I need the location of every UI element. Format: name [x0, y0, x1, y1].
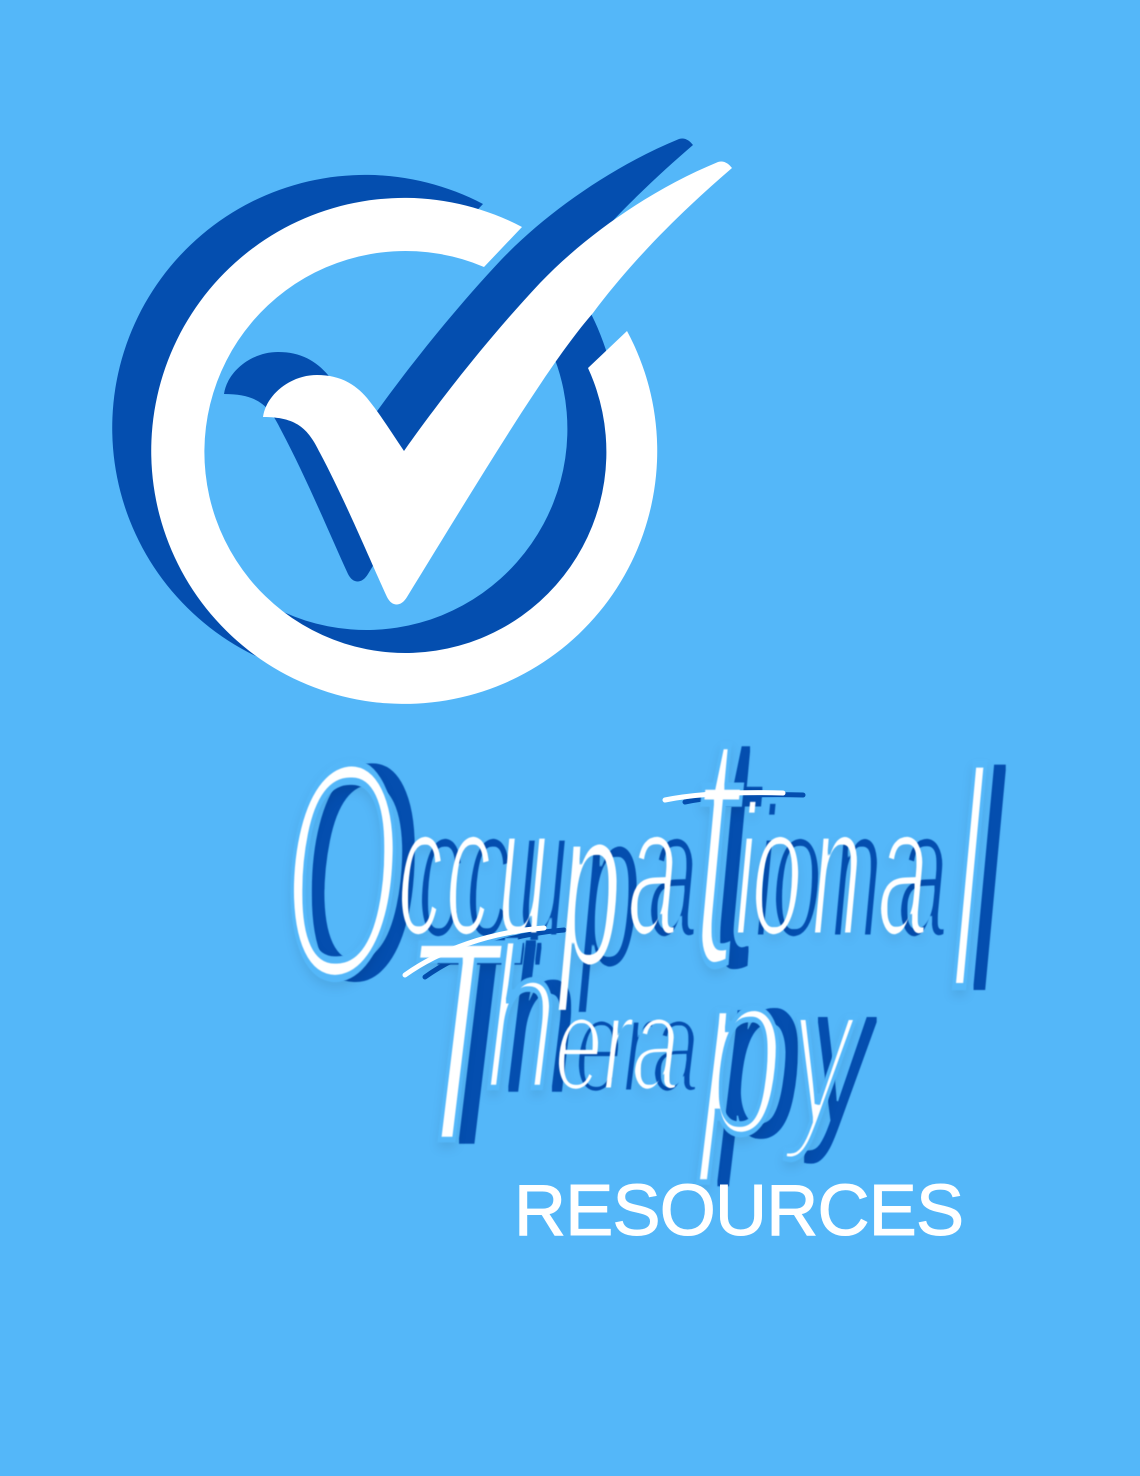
logo: circled check mark: [112, 138, 732, 704]
heading line: Occupational: i: [735, 767, 757, 976]
title shadow: Occupational Therapy in dark blue: [303, 657, 1007, 1206]
icon: white ring: [151, 198, 657, 704]
title shadow: Occupational Therapy in dark blue: c: [466, 769, 511, 978]
icon: dark blue shadow ring: [112, 175, 618, 681]
title shadow: Occupational Therapy in dark blue: a: [652, 970, 699, 1122]
title shadow: Occupational Therapy in dark blue: a: [648, 769, 698, 978]
title shadow: Occupational Therapy in dark blue: y: [803, 943, 879, 1166]
title shadow: Occupational Therapy in dark blue: e: [575, 970, 622, 1122]
heading line: Occupational: c: [398, 767, 443, 976]
heading line: Occupational: t: [692, 655, 744, 1039]
heading line: Therapy: p: [696, 919, 783, 1186]
title shadow: Occupational Therapy in dark blue: O: [303, 697, 420, 1046]
title shadow: Occupational Therapy in dark blue: n: [832, 769, 882, 978]
heading line: Therapy: h: [485, 902, 558, 1136]
title shadow: Occupational Therapy in dark blue: t: [712, 657, 764, 1041]
title shadow: Occupational Therapy in dark blue: o: [772, 769, 822, 978]
title shadow: Occupational Therapy in dark blue: l: [970, 708, 1007, 1059]
heading line: Occupational: l: [950, 706, 987, 1057]
heading line: Therapy: a: [632, 968, 679, 1120]
heading line: Occupational: p: [557, 758, 621, 1015]
title shadow: Occupational Therapy in dark blue: p: [577, 760, 641, 1017]
subtitle: RESOURCES: RESOURCES: [514, 1171, 964, 1251]
icon: white check: [263, 161, 732, 605]
title shadow: Occupational Therapy in dark blue: c: [418, 769, 463, 978]
title shadow: Occupational Therapy in dark blue: a: [898, 769, 948, 978]
heading line: Occupational: O: [283, 695, 400, 1044]
heading line: Therapy: r: [603, 968, 634, 1120]
heading line: Occupational: u: [498, 767, 548, 976]
title shadow: Occupational Therapy in dark blue: r: [623, 970, 654, 1122]
title: Occupational Therapy in white: [283, 655, 987, 1204]
title shadow: Occupational Therapy in dark blue: i: [755, 769, 777, 978]
heading line: Occupational: o: [752, 767, 802, 976]
icon: dark blue shadow check: [224, 138, 693, 582]
heading line: Therapy: T: [400, 877, 523, 1204]
heading line: Occupational: a: [878, 767, 928, 976]
heading line: Therapy: y: [783, 941, 859, 1164]
heading line: Occupational: c: [446, 767, 491, 976]
title shadow: Occupational Therapy in dark blue: p: [716, 921, 803, 1188]
title shadow: Occupational Therapy in dark blue: h: [505, 904, 578, 1138]
title shadow: Occupational Therapy in dark blue: T: [420, 879, 543, 1206]
title shadow: Occupational Therapy in dark blue: u: [518, 769, 568, 978]
heading line: Occupational: n: [812, 767, 862, 976]
heading line: Occupational: a: [628, 767, 678, 976]
heading line: Therapy: e: [555, 968, 602, 1120]
